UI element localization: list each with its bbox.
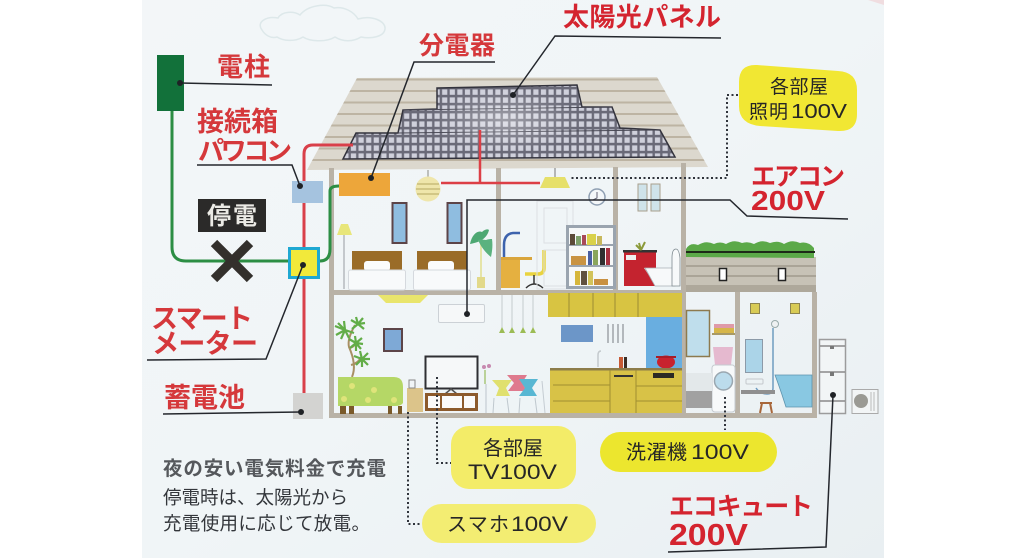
leader lines [147, 36, 848, 552]
label: storage battery: 蓄電池 [164, 383, 245, 413]
callout: room lighting 100V: 照明 [749, 102, 788, 123]
note text: 充電使用に応じて放電。 [163, 513, 370, 534]
pendant lamp [416, 170, 440, 202]
vase [482, 364, 491, 413]
washroom mirror [686, 310, 710, 356]
callout: washing machine 100V [600, 432, 777, 472]
utility pole box [157, 55, 184, 111]
label: junction box and inverter [197, 107, 292, 166]
label: junction box and inverter: パワコン [198, 136, 292, 166]
side building upper wall [686, 257, 816, 292]
corner tint [868, 0, 884, 5]
floor lamp [337, 224, 352, 289]
laundry basket [713, 347, 733, 365]
small window [638, 184, 660, 211]
label: eco cute 200V [669, 493, 813, 552]
outage badge [198, 199, 266, 232]
red pot [656, 356, 676, 368]
sofa [338, 377, 403, 414]
label: solar panel: 太陽光パネル [563, 2, 721, 32]
house walls [329, 163, 817, 418]
red line to solar panels [304, 145, 353, 393]
bathroom squares [750, 304, 800, 314]
callout: washing machine 100V: 洗濯機 [626, 441, 687, 464]
clock [589, 189, 605, 205]
desk and lamp [501, 233, 532, 288]
shower [756, 320, 778, 394]
label: air conditioner 200V: 200V [751, 185, 825, 216]
label: junction box and inverter: 接続箱 [197, 107, 278, 137]
wash basin [686, 373, 712, 408]
callout: room TV 100V: 各部屋 [483, 437, 543, 460]
callout: smartphone 100V [422, 504, 596, 543]
eco cute water heater [820, 340, 846, 414]
bathroom mirror [746, 340, 762, 372]
power outage cross [214, 243, 250, 279]
note text: 夜の安い電気料金で充電 [163, 458, 386, 480]
outdoor unit [852, 390, 878, 414]
TV stand [426, 394, 476, 410]
red line to pendant and ceiling lights [441, 130, 540, 183]
label: smart meter: メーター [152, 329, 258, 359]
bath counter and stool [741, 379, 775, 413]
callout: room TV 100V: TV100V [468, 461, 557, 484]
label: utility pole: 電柱 [217, 52, 270, 82]
smart meter [290, 248, 318, 278]
storage battery [293, 393, 323, 419]
solar panels [343, 85, 675, 159]
pendant lights [499, 295, 536, 333]
faucet and bottles [598, 351, 627, 370]
callout: washing machine 100V: 100V [691, 441, 749, 464]
green line to distribution board [320, 186, 339, 261]
callout: smartphone 100V: スマホ [447, 514, 509, 536]
note text: 停電時は、太陽光から [163, 487, 348, 508]
potted plant [470, 229, 492, 288]
desk chair [525, 250, 544, 288]
picture frame [384, 329, 402, 351]
label: air conditioner 200V: エアコン [751, 163, 845, 191]
beds [348, 251, 470, 290]
label: eco cute 200V: 200V [669, 517, 748, 552]
house illustration [307, 77, 817, 418]
toilet [645, 249, 680, 286]
junction box [292, 181, 323, 203]
television [426, 356, 478, 394]
bedroom windows [392, 203, 462, 243]
label: air conditioner 200V [751, 163, 845, 216]
towel shelf [712, 324, 735, 335]
callout: room lighting 100V: 各部屋 [770, 76, 828, 98]
outage badge: 停電 [207, 203, 257, 230]
rooftop hedge [686, 241, 815, 258]
air conditioner [438, 304, 484, 322]
bookshelf [568, 226, 614, 288]
label: smart meter: スマート [151, 304, 253, 334]
icon: cloud [260, 5, 385, 41]
callout: smartphone 100V: 100V [511, 513, 568, 536]
roof [307, 77, 708, 170]
ceiling light [540, 168, 570, 188]
distribution board [339, 173, 390, 196]
side table [407, 380, 423, 412]
power lines [172, 111, 540, 393]
red toilet wall [623, 242, 657, 286]
ground floor ceiling light [378, 295, 428, 303]
green utility line [172, 111, 288, 261]
label: smart meter [151, 304, 258, 359]
note text [163, 458, 386, 534]
door [537, 201, 573, 289]
bathtub [775, 375, 812, 407]
dining chairs [492, 375, 545, 413]
paper background [142, 0, 884, 558]
upper kitchen cabinets [548, 293, 682, 317]
palm plant [335, 317, 370, 377]
callout: room TV 100V [451, 426, 576, 489]
blue wall [646, 317, 682, 369]
leader dots [177, 80, 836, 415]
kitchen counter [550, 368, 682, 413]
dotted connectors [408, 95, 738, 524]
kitchen tile [561, 325, 593, 342]
utensils [608, 324, 623, 343]
callout: room lighting 100V [739, 65, 857, 131]
callout: room lighting 100V: 100V [791, 101, 848, 123]
label: distribution board: 分電器 [419, 32, 495, 60]
label: eco cute 200V: エコキュート [669, 493, 813, 521]
washing machine [712, 365, 735, 412]
